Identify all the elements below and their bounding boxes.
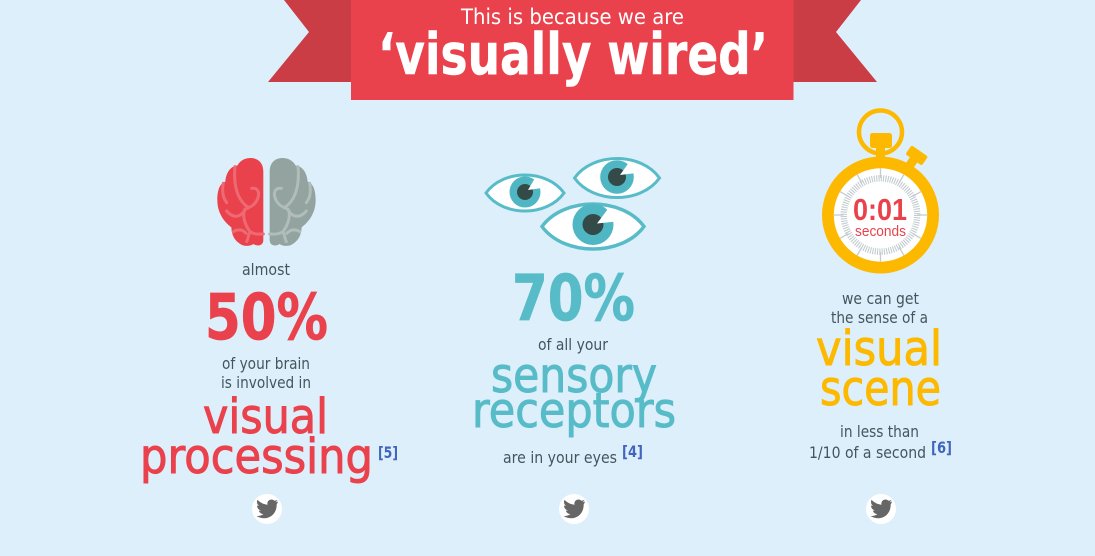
text: sensory: sensory <box>491 348 657 404</box>
text: is involved in: is involved in <box>221 373 311 392</box>
ribbon tail left <box>268 0 351 82</box>
timer unit: seconds <box>855 223 906 240</box>
panel: brain <box>140 158 398 485</box>
text: are in your eyes: are in your eyes <box>503 448 617 467</box>
icon: twitter center <box>559 494 589 524</box>
stat: 70%: 70% <box>512 262 635 335</box>
text: scene: scene <box>820 361 941 417</box>
icon: eye left <box>486 175 564 211</box>
ribbon main <box>351 0 794 100</box>
heading main: ‘visually wired’ <box>378 22 768 88</box>
icon: eye front <box>542 204 644 249</box>
text: visual: visual <box>816 321 942 377</box>
icon: stopwatch <box>822 110 939 274</box>
panel: stopwatch <box>809 110 952 462</box>
icon: brain <box>217 158 316 246</box>
icon: twitter left <box>252 494 282 524</box>
ribbon tail right <box>793 0 877 82</box>
timer value: 0:01 <box>853 192 907 227</box>
text: we can get: we can get <box>842 289 919 308</box>
text: receptors: receptors <box>472 383 676 439</box>
heading intro: This is because we are <box>460 5 684 29</box>
text: the sense of a: the sense of a <box>831 308 928 327</box>
banner <box>268 0 877 100</box>
citation 5: [5] <box>378 443 398 462</box>
citation 4: [4] <box>622 442 643 461</box>
text: in less than: in less than <box>840 422 919 441</box>
stat: 50%: 50% <box>205 281 328 354</box>
icon: eye right <box>574 158 660 198</box>
text: of all your: of all your <box>538 335 608 354</box>
text: visual: visual <box>203 389 328 445</box>
panel: eyes <box>472 158 676 467</box>
icon: twitter right <box>866 494 896 524</box>
text: 1/10 of a second: 1/10 of a second <box>809 443 926 462</box>
citation 6: [6] <box>931 438 952 457</box>
text: processing: processing <box>140 429 373 485</box>
text: almost: almost <box>242 260 290 279</box>
text: of your brain: of your brain <box>222 354 310 373</box>
